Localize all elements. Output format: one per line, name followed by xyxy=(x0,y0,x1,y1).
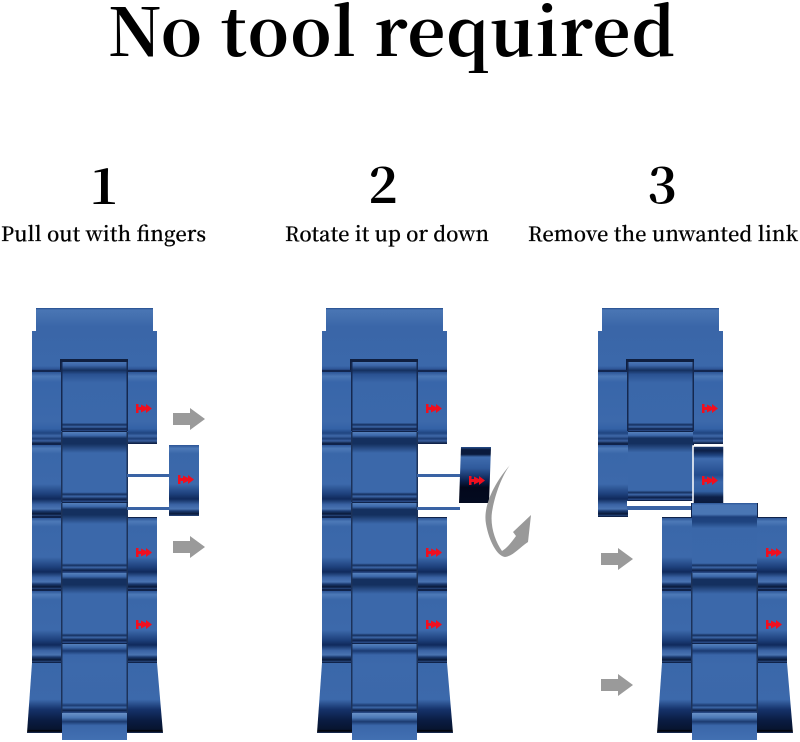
pins xyxy=(417,474,460,510)
step 1 caption: Pull out with fingers xyxy=(1,218,206,247)
left links xyxy=(657,518,692,733)
red markers xyxy=(136,404,194,629)
panel: step 2 watch band xyxy=(317,308,531,740)
white gap xyxy=(627,501,694,506)
step 2 caption: Rotate it up or down xyxy=(285,218,489,247)
panel: step 1 watch band xyxy=(27,308,205,740)
center links xyxy=(61,362,128,740)
step 3 number: 3 xyxy=(647,146,677,218)
step 1 number: 1 xyxy=(89,147,119,219)
heading: step 3 xyxy=(528,146,799,247)
arrow: lower pull direction xyxy=(173,536,205,558)
clasp xyxy=(598,308,723,373)
left links xyxy=(598,372,628,516)
red markers xyxy=(702,404,718,485)
band backing xyxy=(662,503,787,714)
step 2 number: 2 xyxy=(368,146,398,218)
band backing xyxy=(32,360,157,714)
center links xyxy=(691,503,758,740)
red markers xyxy=(426,404,485,629)
clasp xyxy=(322,308,447,373)
center links xyxy=(627,362,694,500)
pins xyxy=(127,474,170,510)
icon: curved rotation arrow xyxy=(485,465,531,557)
right links xyxy=(127,372,163,733)
band backing xyxy=(598,360,723,517)
pin xyxy=(627,506,693,510)
arrow: upper push direction xyxy=(601,548,633,570)
right link xyxy=(693,372,723,443)
arrow: upper pull direction xyxy=(173,408,205,430)
detached link xyxy=(169,445,199,516)
left links xyxy=(317,372,352,733)
arrow: lower push direction xyxy=(601,674,633,696)
red markers xyxy=(766,548,782,629)
panel: step 3 watch band lower part xyxy=(601,503,793,740)
clasp xyxy=(32,308,157,373)
band backing xyxy=(322,360,447,714)
small unwanted link xyxy=(693,446,724,504)
center links xyxy=(351,362,418,740)
right links xyxy=(757,518,793,733)
heading: step 1 xyxy=(1,147,206,247)
panel: step 3 watch band upper part xyxy=(598,308,724,517)
left links xyxy=(27,372,62,733)
rotated link xyxy=(459,447,491,503)
step 3 caption: Remove the unwanted link xyxy=(528,218,799,247)
heading: step 2 xyxy=(285,146,489,247)
right links xyxy=(417,372,453,733)
